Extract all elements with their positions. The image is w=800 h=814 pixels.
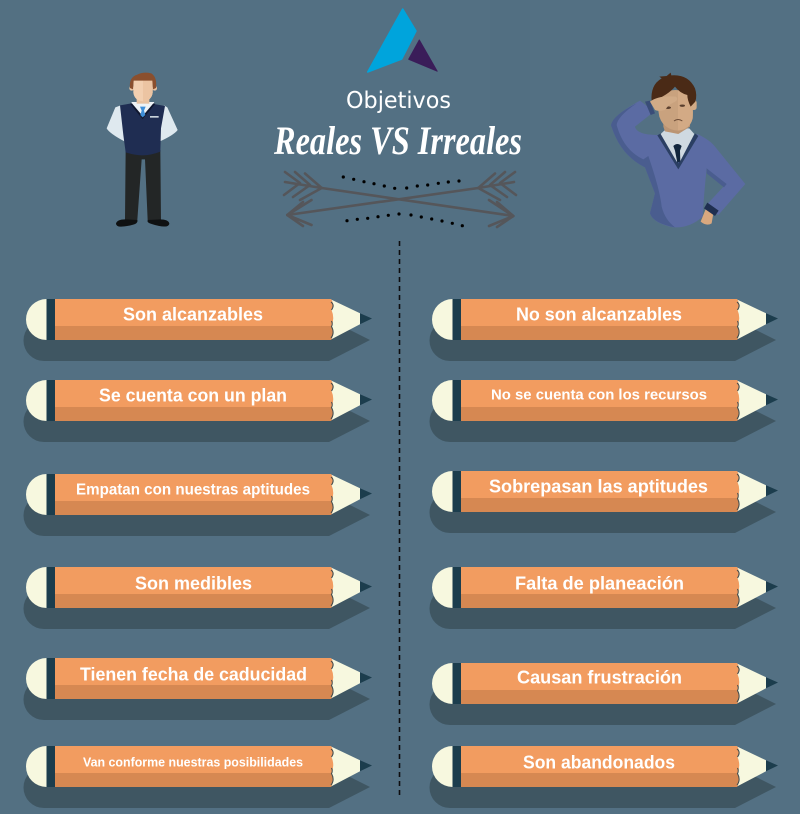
pencil: Falta de planeación: Falta de planeación [515,574,684,594]
pencil: Causan frustración [430,663,778,725]
pencil: No se cuenta con los recursos [430,380,778,442]
pencil: Se cuenta con un plan [24,380,372,442]
pencil: Empatan con nuestras aptitudes [24,474,372,536]
pencil: Son medibles [24,567,372,629]
crossed arrows ornament [284,172,516,227]
pencil: Falta de planeación [430,567,778,629]
pencil: No son alcanzables: No son alcanzables [516,304,682,324]
pencil: Tienen fecha de caducidad [24,658,372,720]
pencil: Son alcanzables [24,299,372,361]
icon: frustrated man in sweater [611,73,745,227]
pencil: Van conforme nuestras posibilidades: Van conforme nuestras posibilidades [83,756,303,770]
dotted ornament [342,175,464,227]
pencil: Se cuenta con un plan: Se cuenta con un plan [99,386,287,406]
pencil: Causan frustración: Causan frustración [517,668,682,688]
pencil: Son abandonados: Son abandonados [523,752,675,772]
pencil: Son medibles: Son medibles [135,574,252,594]
pencil: No son alcanzables [430,299,778,361]
logo [368,9,437,72]
pencil: Sobrepasan las aptitudes: Sobrepasan las aptitudes [489,476,708,496]
pencil: No se cuenta con los recursos: No se cuenta con los recursos [491,388,707,404]
pencil: Tienen fecha de caducidad: Tienen fecha de caducidad [80,664,307,684]
pencil: Van conforme nuestras posibilidades [24,746,372,808]
pencil: Son abandonados [430,746,778,808]
icon: confident man in vest [107,73,178,227]
pencil: Sobrepasan las aptitudes [430,471,778,533]
pencil: Son alcanzables: Son alcanzables [123,304,263,324]
title: Reales VS Irreales: Reales VS Irreales [273,118,522,163]
pencil: Empatan con nuestras aptitudes: Empatan con nuestras aptitudes [76,482,310,498]
title: Objetivos: Objetivos [346,88,451,114]
dashed center divider [398,241,400,796]
